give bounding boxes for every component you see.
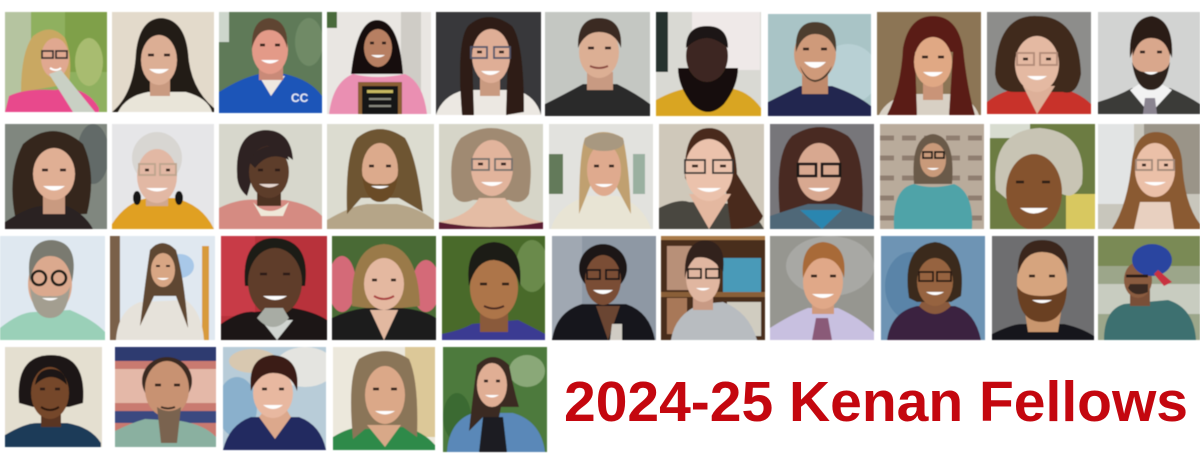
portrait: row 2, photo 6 (548, 124, 654, 230)
portrait: row 2, photo 8 (769, 123, 875, 230)
portrait: row 2, photo 10 (989, 123, 1096, 230)
portrait: row 1, photo 10 (986, 11, 1092, 115)
portrait: row 2, photo 3 (218, 124, 323, 230)
portrait: row 2, photo 9 (879, 124, 984, 230)
portrait: row 1, photo 4 (326, 11, 432, 115)
portrait: row 2, photo 7 (658, 124, 764, 230)
portrait: row 1, photo 11 (1097, 12, 1200, 115)
portrait: row 2, photo 11 (1098, 123, 1200, 230)
portrait: row 2, photo 1 (4, 123, 108, 230)
portrait: row 3, photo 9 (880, 235, 986, 341)
portrait: row 1, photo 5 (435, 11, 542, 116)
portrait: row 3, photo 4 (331, 235, 437, 341)
portrait: row 4, photo 5 (442, 346, 548, 453)
portrait: row 3, photo 2 (109, 235, 216, 341)
portrait: row 2, photo 5 (438, 124, 544, 230)
portrait: row 3, photo 3 (220, 235, 328, 341)
portrait: row 4, photo 1 (4, 346, 102, 448)
portrait: row 3, photo 10 (991, 235, 1095, 341)
title: 2024-25 Kenan Fellows (564, 370, 1188, 434)
portrait: row 1, photo 1 (4, 11, 108, 113)
portrait: row 3, photo 1 (0, 236, 106, 340)
portrait: row 1, photo 2 (112, 12, 215, 113)
portrait: row 3, photo 8 (769, 235, 875, 341)
portrait: row 1, photo 6 (544, 12, 651, 117)
portrait: row 3, photo 7 (660, 235, 766, 341)
portrait: row 4, photo 3 (222, 346, 327, 451)
portrait: row 1, photo 9 (876, 11, 982, 116)
portrait: row 1, photo 8 (767, 14, 872, 117)
portrait: row 2, photo 2 (111, 124, 214, 230)
portrait: row 3, photo 5 (441, 235, 546, 341)
portrait: row 3, photo 11 (1097, 235, 1200, 341)
portrait: row 1, photo 3 (218, 11, 323, 114)
portrait: row 2, photo 4 (326, 124, 435, 230)
portrait: row 4, photo 4 (332, 346, 436, 451)
portrait: row 3, photo 6 (551, 235, 657, 341)
portrait: row 1, photo 3: CC (291, 91, 309, 105)
portrait: row 4, photo 2 (114, 346, 217, 448)
portrait: row 1, photo 7 (655, 11, 762, 117)
